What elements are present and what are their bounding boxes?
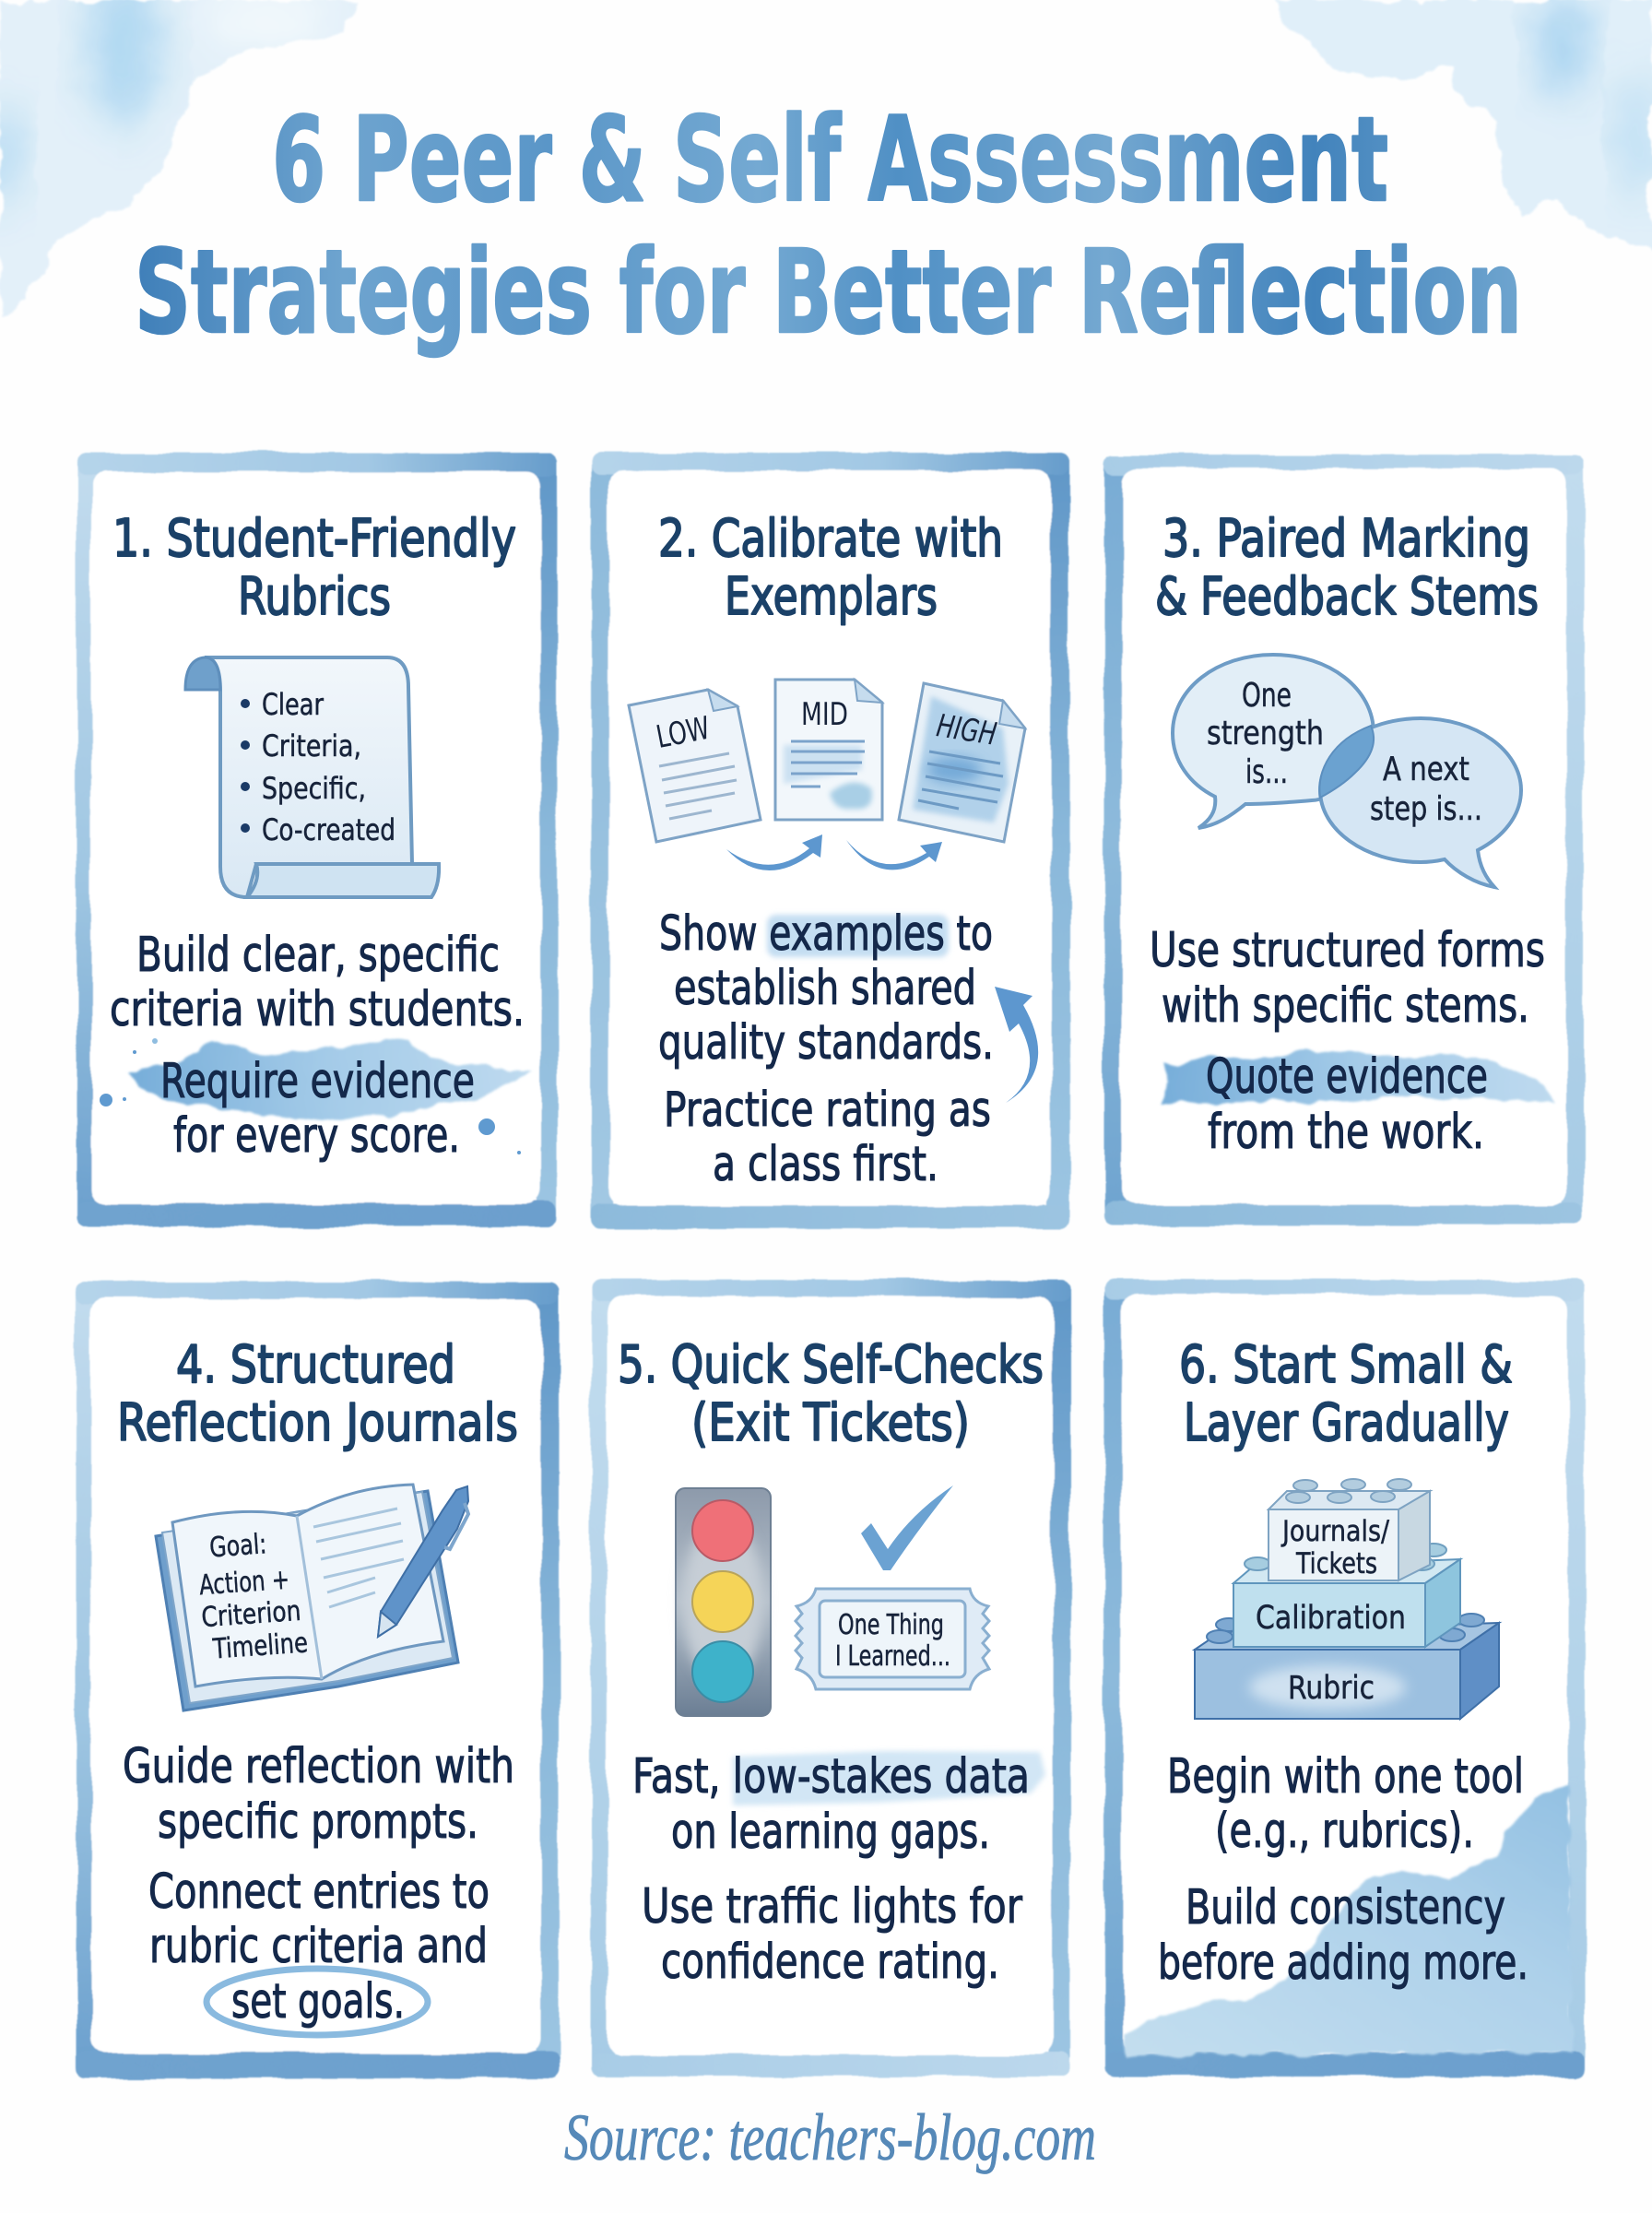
block: rubric (1195, 1614, 1499, 1719)
block: rubric: Rubric (1288, 1670, 1375, 1707)
block: journals and tickets: Journals/ (1280, 1515, 1389, 1548)
document: high (899, 683, 1025, 842)
body text 3 (1150, 923, 1545, 1160)
icon: scroll (185, 657, 439, 897)
heading 4: Reflection Journals (117, 1393, 518, 1453)
brush highlight: quote evidence (1159, 1051, 1555, 1105)
icon: scroll: Clear (262, 687, 324, 722)
icon: speech bubbles: A next (1383, 751, 1469, 788)
icon: exit ticket: I Learned... (835, 1640, 950, 1673)
body text 2: Show examples to (659, 906, 993, 962)
body text 2: establish shared (674, 961, 976, 1016)
body text 6 (1158, 1749, 1528, 1991)
heading 2: Exemplars (725, 567, 938, 627)
body text 1: for every score. (173, 1108, 460, 1164)
document: high: HIGH (934, 707, 999, 753)
icon: speech bubbles: step is... (1370, 790, 1482, 828)
panel frame 4 (77, 1282, 559, 2078)
icon: speech bubbles: One (1242, 677, 1292, 715)
body text 3: Use structured forms (1150, 923, 1545, 978)
panel: 2 Calibrate with Exemplars (591, 453, 1069, 1228)
icon: exit ticket: One Thing (838, 1609, 944, 1641)
block: journals and tickets: Tickets (1295, 1547, 1377, 1580)
icon: checkmark (861, 1485, 953, 1570)
heading 3: & Feedback Stems (1155, 567, 1539, 627)
body text 6: Begin with one tool (1167, 1749, 1524, 1805)
icon: exemplar documents (629, 680, 1025, 842)
body text 2 (658, 906, 994, 1192)
body text 5: confidence rating. (661, 1935, 999, 1990)
icon: stacked building blocks (1195, 1479, 1499, 1719)
icon: scroll: Criteria, (262, 728, 361, 763)
heading 5: (Exit Tickets) (691, 1393, 970, 1453)
body text 2: Practice rating as (664, 1083, 991, 1138)
body text 3: with specific stems. (1162, 978, 1529, 1034)
body text 6: (e.g., rubrics). (1215, 1804, 1474, 1859)
highlight: examples (767, 915, 949, 957)
source credit: Source: teachers-blog.com (564, 2101, 1096, 2174)
icon: scroll: Specific, (262, 771, 366, 806)
body text 1: criteria with students. (110, 982, 525, 1037)
icon: scroll: Co-created (262, 812, 395, 847)
body text 2: a class first. (713, 1137, 938, 1192)
watercolor wash: rising hill (1121, 1784, 1573, 2056)
body text 6: Build consistency (1186, 1880, 1505, 1935)
body text 1: Build clear, specific (136, 928, 500, 983)
watercolor wash: top right (1272, 0, 1652, 258)
body text 4: Connect entries to (148, 1864, 490, 1920)
block: journals and tickets (1268, 1479, 1430, 1580)
body text 4 (123, 1739, 514, 2030)
body text 1 (110, 928, 525, 1164)
body text 5: Fast, low-stakes data (632, 1749, 1030, 1805)
body text 4: Guide reflection with (123, 1739, 514, 1794)
icon: traffic light (676, 1488, 771, 1716)
panel frame 3 (1104, 455, 1584, 1225)
heading 6: 6. Start Small & (1179, 1335, 1513, 1395)
highlight: low-stakes data (733, 1751, 1045, 1805)
icon: speech bubbles: is... (1245, 753, 1288, 791)
heading 1: Rubrics (238, 567, 391, 627)
icon: speech bubbles: strength (1207, 715, 1324, 752)
body text 5: on learning gaps. (671, 1805, 990, 1860)
heading 3: 3. Paired Marking (1162, 509, 1530, 569)
icon: open journal with pen: Timeline (211, 1627, 309, 1666)
heading 3 (1155, 509, 1539, 627)
body text 5 (632, 1749, 1030, 1990)
panel: 5 Quick Self-Checks (591, 1280, 1070, 2077)
panel frame 1 (77, 453, 558, 1226)
heading 6: Layer Gradually (1184, 1393, 1509, 1453)
document: low: LOW (654, 710, 713, 756)
body text 1: Require evidence (160, 1054, 475, 1109)
body text 4: specific prompts. (158, 1794, 478, 1850)
body text 4: set goals. (231, 1974, 405, 2030)
arrow: curved feedback loop (995, 987, 1038, 1103)
icon: open journal with pen: Goal: (208, 1528, 267, 1564)
heading 6 (1179, 1335, 1513, 1453)
body text 3: Quote evidence (1206, 1049, 1488, 1105)
icon: open journal with pen: Criterion (200, 1595, 302, 1634)
block: calibration (1233, 1544, 1460, 1647)
body text 4: rubric criteria and (149, 1919, 488, 1974)
body text 5: Use traffic lights for (642, 1879, 1022, 1935)
icon: speech bubbles (1173, 655, 1521, 887)
panel: 3 Paired Marking (1104, 455, 1584, 1225)
heading 2: 2. Calibrate with (658, 509, 1003, 569)
brush highlight: require evidence (100, 1037, 531, 1154)
panel frame 5 (591, 1280, 1070, 2077)
heading 4 (117, 1335, 518, 1453)
panel: 6 Start Small (1104, 1280, 1586, 2077)
heading 1 (112, 509, 516, 627)
arrow: mid to high (846, 840, 942, 870)
document: low (629, 690, 761, 842)
panel frame 2 (591, 453, 1069, 1228)
panel: 4 Reflection Journals (77, 1282, 559, 2078)
block: calibration: Calibration (1256, 1600, 1406, 1637)
arrow: low to mid (726, 834, 822, 870)
icon: open journal with pen (156, 1485, 468, 1710)
heading 1: 1. Student-Friendly (112, 509, 516, 569)
panel: 1 Student-Friendly Rubrics (77, 453, 558, 1226)
document: mid (775, 680, 882, 820)
panel frame 6 (1104, 1280, 1586, 2077)
heading 2 (658, 509, 1003, 627)
callout ring: set goals (206, 1969, 428, 2035)
icon: exit ticket (796, 1589, 989, 1689)
heading 5 (618, 1335, 1044, 1453)
title (135, 91, 1522, 360)
body text 3: from the work. (1208, 1105, 1484, 1160)
heading 4: 4. Structured (176, 1335, 455, 1395)
body text 6: before adding more. (1158, 1935, 1528, 1991)
document: mid: MID (801, 696, 848, 733)
watercolor wash: top left (0, 0, 369, 323)
body text 2: quality standards. (658, 1015, 994, 1071)
icon: open journal with pen: Action + (198, 1564, 290, 1602)
heading 5: 5. Quick Self-Checks (618, 1335, 1044, 1395)
